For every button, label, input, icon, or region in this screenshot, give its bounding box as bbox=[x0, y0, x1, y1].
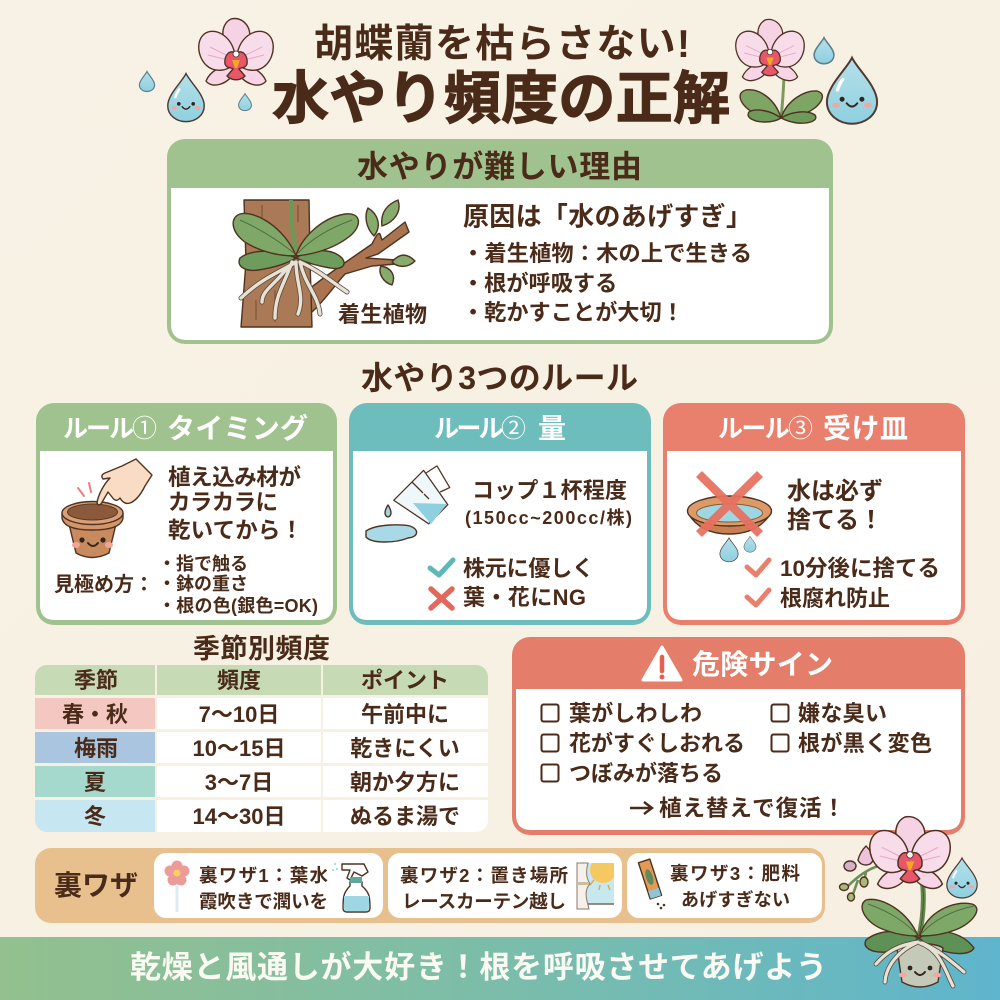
table: frequency by season: 春・秋 bbox=[62, 702, 128, 727]
icon: window with lace curtain bbox=[576, 862, 614, 910]
text: rule 1 main: 乾いてから！ bbox=[168, 518, 303, 543]
heading: danger signs: 危険サイン bbox=[692, 649, 833, 680]
text: gently at the base: 株元に優しく bbox=[463, 556, 594, 581]
panel: why watering is difficult bbox=[167, 139, 833, 344]
table: frequency by season: ポイント bbox=[361, 668, 449, 693]
checklist: danger signs: 花がすぐしおれる bbox=[569, 731, 745, 756]
footer banner bbox=[0, 937, 1000, 1000]
text: tip 3: あげすぎない bbox=[681, 889, 790, 910]
text: no leaves or flowers: 葉・花にNG bbox=[463, 585, 586, 610]
icon: pink flower bbox=[164, 860, 190, 912]
checklist: danger signs: 嫌な臭い bbox=[798, 701, 887, 726]
card: tip 3 bbox=[627, 853, 822, 918]
text: reason list: ・乾かすことが大切！ bbox=[462, 299, 684, 325]
checklist: danger signs: つぼみが落ちる bbox=[569, 761, 723, 786]
illustration: crossed-out saucer bbox=[688, 477, 772, 562]
text: tip 2: 裏ワザ2：置き場所 bbox=[400, 865, 568, 886]
text: tip 1: 霞吹きで潤いを bbox=[199, 891, 328, 912]
illustration: epiphyte on a tree bbox=[233, 200, 415, 327]
title line 2: 水やり頻度の正解 bbox=[272, 67, 730, 131]
text: reason list: ・着生植物：木の上で生きる bbox=[462, 241, 752, 266]
heading: rule 3: 受け皿 bbox=[823, 413, 908, 444]
heading: rule 2 bbox=[434, 413, 566, 444]
illustration: water drops left bbox=[139, 72, 251, 122]
caption: epiphyte: 着生植物 bbox=[338, 302, 427, 327]
table: frequency by season: 朝か夕方に bbox=[350, 770, 460, 795]
icon: check 1 bbox=[747, 560, 769, 575]
text: how to judge: 見極め方： bbox=[54, 573, 154, 596]
illustration: top-right orchid plant bbox=[736, 19, 822, 123]
table: frequency by season: 冬 bbox=[84, 804, 106, 829]
table: frequency by season: ぬるま湯で bbox=[350, 804, 460, 829]
table: frequency by season: 頻度 bbox=[217, 668, 261, 693]
text: cause: 原因は「水のあげすぎ」 bbox=[463, 202, 752, 232]
illustration: water drops right bbox=[814, 38, 877, 124]
text: one cup: コップ１杯程度 bbox=[472, 478, 627, 503]
text: tip 2: レースカーテン越し bbox=[402, 891, 566, 912]
title line 1: 胡蝶蘭を枯らさない! bbox=[314, 23, 690, 66]
text: judge list bbox=[158, 553, 318, 616]
text: tip 3: 裏ワザ3：肥料 bbox=[670, 863, 800, 884]
panel: rule 1 timing bbox=[36, 403, 337, 625]
table: frequency by season: 10～15日 bbox=[193, 736, 285, 761]
text: discard after ten minutes: 10分後に捨てる bbox=[780, 556, 940, 581]
icon: warning triangle bbox=[643, 647, 681, 680]
table: frequency by season: 乾きにくい bbox=[350, 736, 460, 761]
illustration: top-left orchid bbox=[199, 19, 273, 85]
text: tip 1: 裏ワザ1：葉水 bbox=[199, 865, 328, 886]
heading: rule 1: ルール① bbox=[63, 415, 157, 443]
table: frequency by season: 14～30日 bbox=[193, 804, 285, 829]
heading: rule 1: タイミング bbox=[167, 412, 308, 444]
table: frequency by season: 7～10日 bbox=[199, 702, 279, 727]
text: tip 1 bbox=[199, 865, 328, 912]
heading: rule 3: ルール③ bbox=[718, 415, 813, 443]
card: tip 2 bbox=[388, 853, 622, 918]
icon: spray bottle bbox=[332, 863, 370, 912]
text: recover by repotting: 植え替えで復活！ bbox=[659, 796, 845, 821]
heading: why watering is difficult: 水やりが難しい理由 bbox=[357, 150, 642, 184]
text: cup amount: (150cc~200cc/株) bbox=[465, 508, 632, 528]
table: frequency by season: 夏 bbox=[84, 770, 106, 795]
checklist: danger signs: 根が黒く変色 bbox=[798, 731, 932, 756]
icon: red cross bbox=[431, 589, 452, 608]
illustration: bottom-right orchid plant bbox=[840, 817, 977, 987]
icon: teal check bbox=[430, 560, 453, 575]
text: always discard water: 水は必ず bbox=[787, 478, 883, 505]
text: rule 1 main: カラカラに bbox=[168, 490, 278, 515]
card: tip 1 bbox=[154, 853, 383, 918]
illustration: pot with pointing hand bbox=[62, 459, 152, 558]
heading: three rules: 水やり3つのルール bbox=[361, 360, 638, 396]
text: always discard water: 捨てる！ bbox=[787, 507, 883, 534]
table: frequency by season: 午前中に bbox=[361, 702, 449, 727]
text: reason list bbox=[462, 241, 752, 325]
text: tip 2 bbox=[400, 865, 568, 912]
text: reason list: ・根が呼吸する bbox=[462, 270, 617, 296]
icon: check 2 bbox=[747, 590, 769, 605]
panel: danger signs bbox=[512, 637, 965, 835]
text: rule 1 main bbox=[168, 464, 303, 543]
heading: rule 1 bbox=[63, 412, 308, 444]
text: rule 1 main: 植え込み材が bbox=[168, 464, 301, 490]
text: judge list: ・鉢の重さ bbox=[158, 574, 248, 594]
heading: tips: 裏ワザ bbox=[54, 870, 138, 901]
illustration: small smiling drop bbox=[947, 858, 977, 898]
table: frequency by season: 3～7日 bbox=[205, 770, 273, 795]
text: prevents root rot: 根腐れ防止 bbox=[780, 586, 890, 611]
checklist: danger signs: 葉がしわしわ bbox=[569, 701, 702, 726]
heading: rule 2: 量 bbox=[538, 413, 566, 444]
table: frequency by season: 季節 bbox=[74, 668, 118, 693]
text: judge list: ・指で触る bbox=[158, 553, 248, 574]
table: frequency by season: 梅雨 bbox=[74, 736, 118, 761]
heading: frequency by season: 季節別頻度 bbox=[193, 634, 330, 664]
table: frequency by season bbox=[35, 665, 488, 832]
text: judge list: ・根の色(銀色=OK) bbox=[158, 595, 318, 616]
heading: rule 2: ルール② bbox=[434, 415, 526, 443]
heading: rule 3 bbox=[718, 413, 908, 444]
panel: rule 2 amount bbox=[349, 403, 651, 625]
footer message: 乾燥と風通しが大好き！根を呼吸させてあげよう bbox=[130, 950, 827, 985]
illustration: measuring jug and puddle bbox=[366, 461, 462, 542]
text: tip 3 bbox=[670, 863, 800, 910]
panel: tips band bbox=[35, 848, 825, 923]
panel: rule 3 saucer bbox=[663, 403, 965, 625]
text: always discard water bbox=[787, 478, 883, 534]
checklist: danger signs bbox=[542, 701, 932, 786]
icon: fertilizer tube bbox=[638, 859, 665, 909]
